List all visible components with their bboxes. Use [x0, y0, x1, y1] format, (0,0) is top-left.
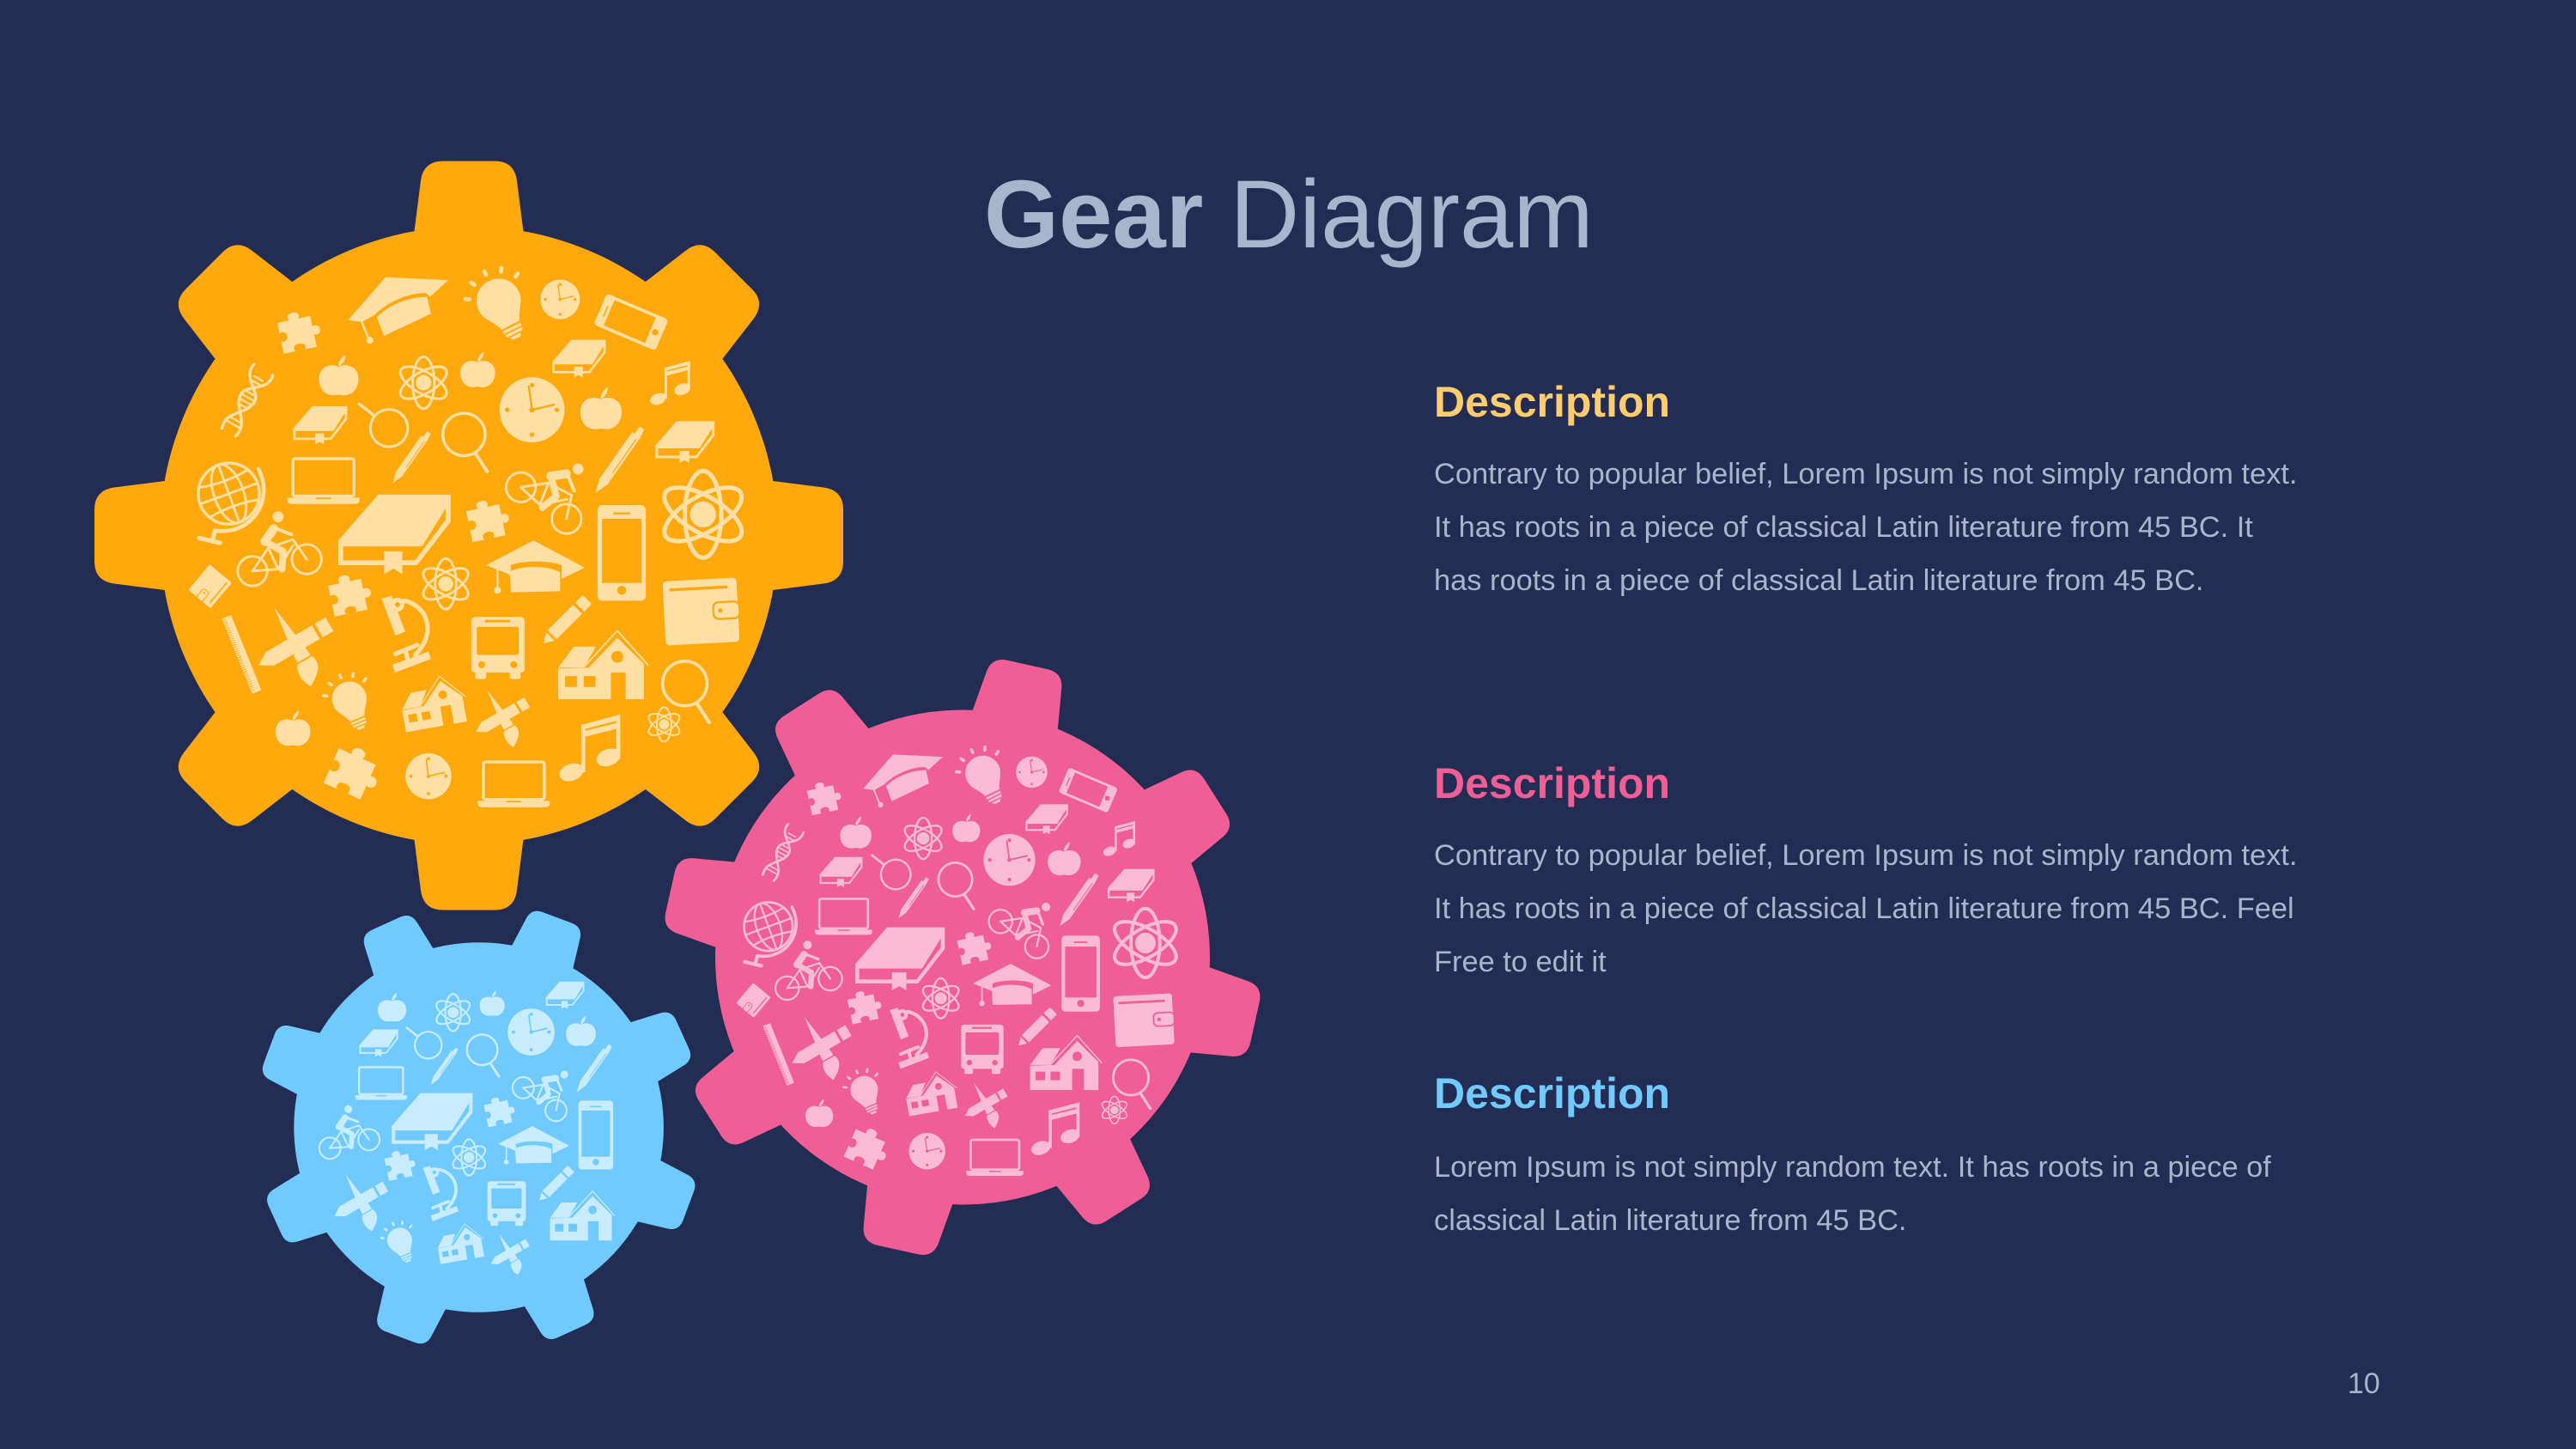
body text 2: Contrary to popular belief, Lorem Ipsum is not simply random text.: [1434, 839, 2297, 872]
body text 2: Free to edit it: [1434, 946, 1607, 978]
pink gear body: [605, 600, 1320, 1315]
orange gear icon cluster: [188, 259, 750, 807]
body text 2: [1434, 839, 2297, 978]
body text 2: It has roots in a piece of classical Latin literature from 45 BC. Feel: [1434, 892, 2294, 925]
title: Gear Diagram: [984, 161, 1594, 268]
gear: orange: [94, 161, 843, 910]
page number: 10: [2348, 1367, 2380, 1400]
body text 1: has roots in a piece of classical Latin literature from 45 BC.: [1434, 564, 2203, 597]
description 3: [1434, 1069, 2271, 1237]
description 1: [1434, 378, 2297, 597]
gear: blue: [191, 839, 767, 1416]
pink gear icon cluster: [736, 740, 1182, 1176]
body text 3: classical Latin literature from 45 BC.: [1434, 1204, 1906, 1237]
body text 1: It has roots in a piece of classical Latin literature from 45 BC. It: [1434, 511, 2253, 544]
blue gear body: [191, 839, 767, 1416]
gear: pink: [605, 600, 1320, 1315]
orange gear body: [94, 161, 843, 910]
heading 1: Description: [1434, 378, 1670, 426]
heading 2: Description: [1434, 759, 1670, 807]
blue gear icon cluster: [319, 982, 615, 1276]
description 2: [1434, 759, 2297, 978]
body text 1: Contrary to popular belief, Lorem Ipsum is not simply random text.: [1434, 458, 2297, 490]
body text 3: Lorem Ipsum is not simply random text. It has roots in a piece of: [1434, 1151, 2271, 1184]
body text 1: [1434, 458, 2297, 597]
body text 3: [1434, 1151, 2271, 1237]
heading 3: Description: [1434, 1069, 1670, 1117]
